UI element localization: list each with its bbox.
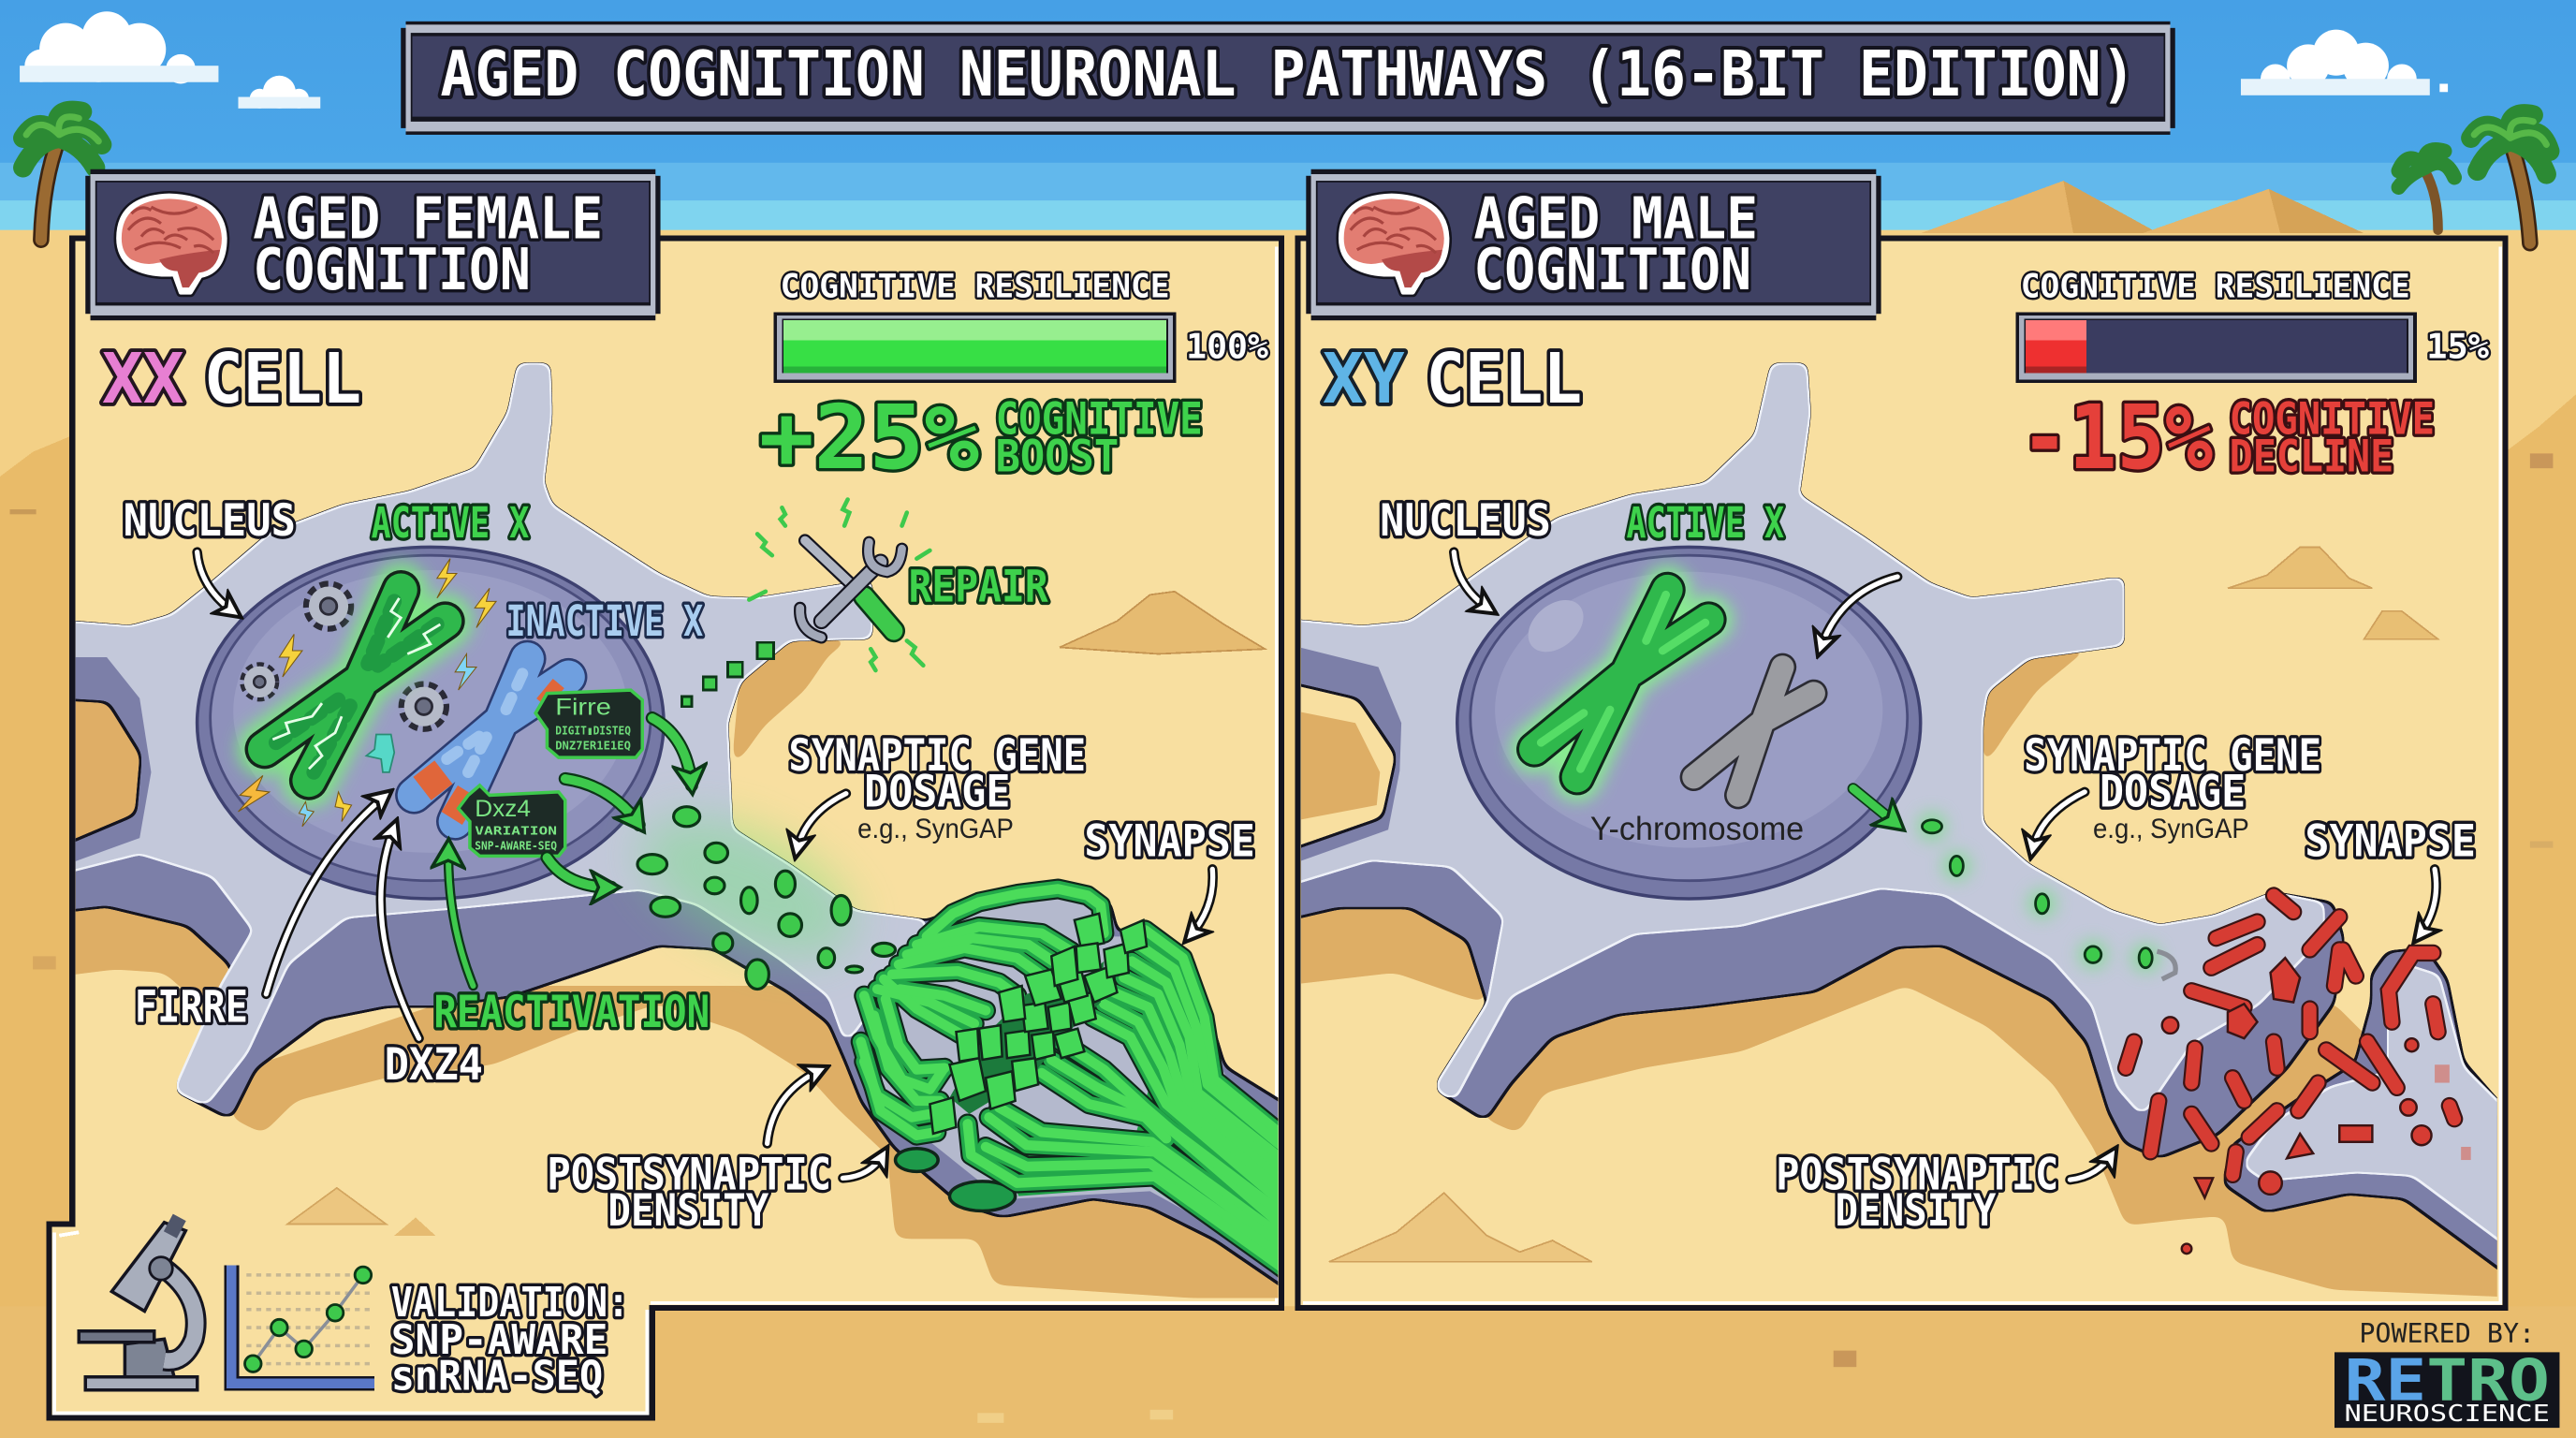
label: synapse, male bbox=[2305, 815, 2476, 936]
header text bbox=[253, 185, 603, 303]
stat: -15% cognitive decline: DECLINE bbox=[2230, 432, 2393, 483]
header text, male bbox=[1473, 185, 1758, 303]
label: active X: ACTIVE X bbox=[372, 498, 529, 548]
meter value, male: 15% bbox=[2426, 327, 2489, 367]
panel: aged female cognition bbox=[50, 169, 1314, 1418]
panel: validation bbox=[79, 1214, 629, 1401]
nucleus: male bbox=[1457, 547, 1921, 899]
header text, male: AGED MALE bbox=[1473, 185, 1758, 252]
header text: COGNITION bbox=[253, 237, 531, 303]
XY cell label bbox=[1323, 340, 1582, 419]
sand shadow under male neuron bbox=[1281, 644, 2530, 1298]
icon: brain bbox=[118, 196, 225, 292]
neuron: female cell body and axon bbox=[50, 365, 1314, 1306]
tag: Firre: DIGIT▮DISTEQ bbox=[555, 724, 631, 737]
active X chromosome, male bbox=[1534, 590, 1708, 777]
panel: aged male cognition bbox=[1273, 169, 2530, 1308]
arrows: reactivation output bbox=[547, 718, 692, 888]
label: synaptic gene dosage bbox=[788, 730, 1086, 851]
icon: microscope bbox=[79, 1214, 198, 1390]
logo: powered by Retro Neuroscience bbox=[2334, 1318, 2559, 1428]
glow around gene dosage transport bbox=[620, 788, 875, 987]
sand shadow under female neuron bbox=[50, 638, 1314, 1298]
label: synaptic gene dosage, male: SYNAPTIC GENE bbox=[2024, 730, 2321, 782]
meter bar, male bbox=[2016, 312, 2417, 383]
label: Dxz4 with arrow bbox=[381, 827, 483, 1091]
header text: AGED FEMALE bbox=[253, 185, 603, 252]
meter bar bbox=[774, 312, 1177, 383]
label: postsynaptic density, male: DENSITY bbox=[1835, 1185, 1997, 1237]
stat: +25% cognitive boost: BOOST bbox=[996, 432, 1119, 483]
XY cell label: XY bbox=[1323, 340, 1405, 419]
cloud small bbox=[238, 76, 320, 109]
meter value: 100% bbox=[1186, 327, 1268, 367]
green gene product particles, male bbox=[1917, 812, 2175, 979]
inactive X chromosome with escape regions bbox=[414, 659, 568, 822]
XX cell label bbox=[102, 340, 361, 419]
label: nucleus, male bbox=[1380, 495, 1551, 609]
tag: Firre: DNZ7ER1E1EQ bbox=[555, 739, 631, 752]
label: synaptic gene dosage: SYNAPTIC GENE bbox=[788, 730, 1086, 782]
title banner bbox=[401, 22, 2175, 135]
label: synaptic gene dosage: DOSAGE bbox=[864, 767, 1010, 818]
label: postsynaptic density, male bbox=[1776, 1150, 2113, 1237]
tag: Dxz4: SNP-AWARE-SEQ bbox=[475, 839, 557, 852]
label: Firre with arrow: FIRRE bbox=[135, 982, 248, 1034]
label: postsynaptic density: DENSITY bbox=[607, 1185, 769, 1237]
validation text: VALIDATION: bbox=[391, 1279, 629, 1327]
stat: +25% cognitive boost: +25% bbox=[759, 387, 979, 490]
tag: Firre: Firre bbox=[555, 695, 611, 720]
small cyan marker bbox=[366, 734, 394, 772]
cloud right bbox=[2241, 30, 2448, 95]
label: nucleus: NUCLEUS bbox=[124, 495, 296, 547]
logo box bbox=[2334, 1352, 2559, 1428]
arrow: inactive pointer bbox=[1821, 577, 1897, 649]
validation text bbox=[391, 1279, 629, 1401]
label: inactive X: INACTIVE X bbox=[506, 596, 703, 646]
sand dunes, female panel bbox=[287, 592, 1265, 1236]
XX cell label: XX bbox=[102, 340, 184, 419]
meter label: COGNITIVE RESILIENCE bbox=[781, 268, 1170, 306]
logo wordmark: TRO bbox=[2426, 1347, 2550, 1414]
icon: repair wrench and screwdriver bbox=[749, 500, 929, 670]
label: postsynaptic density bbox=[547, 1070, 884, 1237]
label: nucleus bbox=[124, 495, 296, 613]
tag: Dxz4 bbox=[459, 785, 565, 856]
header text, male: COGNITION bbox=[1473, 237, 1751, 303]
icons: gears bbox=[243, 585, 446, 727]
logo wordmark: NEUROSCIENCE bbox=[2345, 1400, 2550, 1427]
synapse: broken red fragments bbox=[2126, 895, 2471, 1254]
label: Dxz4 with arrow: DXZ4 bbox=[385, 1039, 483, 1091]
stat: -15% cognitive decline bbox=[2021, 387, 2435, 490]
active X chromosome, female bbox=[265, 590, 446, 781]
icon: repair path squares bbox=[681, 642, 774, 707]
tag: Dxz4: VARIATION bbox=[475, 825, 557, 838]
tag: Firre bbox=[535, 690, 642, 757]
meter label, male: COGNITIVE RESILIENCE bbox=[2021, 268, 2410, 306]
label: synaptic gene dosage, male bbox=[2024, 730, 2321, 851]
label: synapse bbox=[1084, 815, 1255, 936]
label: Firre with arrow bbox=[135, 795, 386, 1034]
icon: brain, male bbox=[1340, 196, 1447, 292]
green gene product particles, female bbox=[637, 807, 896, 990]
stat: +25% cognitive boost bbox=[759, 387, 1203, 490]
XY cell label: CELL bbox=[1426, 340, 1582, 419]
synapse: dense green postsynaptic bundle bbox=[861, 888, 1314, 1298]
pyramids bbox=[1921, 181, 2364, 233]
label: active X, male: ACTIVE X bbox=[1627, 498, 1784, 548]
validation text: SNP-AWARE bbox=[391, 1316, 607, 1364]
validation text: snRNA-SEQ bbox=[391, 1353, 603, 1401]
nucleus: female bbox=[198, 547, 664, 899]
label: synapse, male: SYNAPSE bbox=[2305, 815, 2476, 867]
logo wordmark bbox=[2345, 1347, 2550, 1427]
header: aged male cognition bbox=[1306, 169, 1881, 320]
palm tree left bbox=[23, 110, 102, 240]
stat: -15% cognitive decline: -15% bbox=[2021, 387, 2213, 490]
palm trees right bbox=[2398, 114, 2550, 243]
cloud left bbox=[20, 11, 218, 84]
label: reactivation with arrow bbox=[433, 848, 710, 1038]
label: postsynaptic density: POSTSYNAPTIC bbox=[547, 1150, 831, 1201]
header: aged female cognition bbox=[85, 169, 661, 320]
title text: AGED COGNITION NEURONAL PATHWAYS (16-BIT EDITION) bbox=[440, 37, 2136, 110]
tag: Dxz4: Dxz4 bbox=[475, 797, 531, 822]
inactive grey chromosome, male bbox=[1694, 668, 1814, 795]
logo wordmark: RE bbox=[2345, 1347, 2426, 1414]
label: synaptic gene dosage, male: e.g., SynGAP bbox=[2093, 814, 2249, 844]
stat: +25% cognitive boost: COGNITIVE bbox=[996, 393, 1203, 445]
label: synapse: SYNAPSE bbox=[1084, 815, 1255, 867]
label: synaptic gene dosage, male: DOSAGE bbox=[2100, 767, 2246, 818]
cognitive resilience meter, male bbox=[2016, 268, 2489, 383]
label: reactivation with arrow: REACTIVATION bbox=[433, 987, 710, 1038]
label: Y-chromosome: Y-chromosome bbox=[1590, 811, 1804, 847]
XX cell label: CELL bbox=[204, 340, 361, 419]
arrow: green output, male bbox=[1853, 788, 1897, 825]
label: nucleus, male: NUCLEUS bbox=[1380, 495, 1551, 547]
cognitive resilience meter, female bbox=[774, 268, 1268, 383]
label: repair: REPAIR bbox=[909, 561, 1048, 612]
neuron: male cell body and axon bbox=[1273, 365, 2530, 1290]
powered by text: POWERED BY: bbox=[2359, 1318, 2535, 1349]
chart: SNP-aware validation bbox=[231, 1265, 374, 1384]
arrow: nucleus bbox=[198, 552, 235, 613]
sand dunes, male panel bbox=[1329, 547, 2438, 1262]
lightning bolts bbox=[238, 559, 496, 827]
label: postsynaptic density, male: POSTSYNAPTIC bbox=[1776, 1150, 2058, 1201]
stat: -15% cognitive decline: COGNITIVE bbox=[2230, 393, 2435, 445]
label: synaptic gene dosage: e.g., SynGAP bbox=[857, 814, 1014, 844]
